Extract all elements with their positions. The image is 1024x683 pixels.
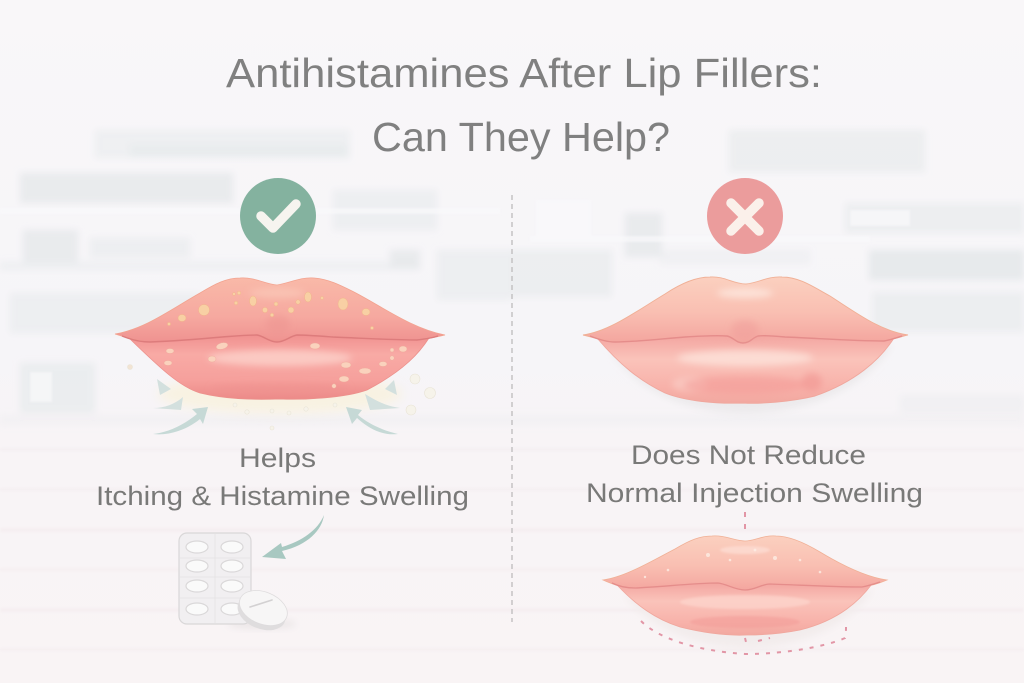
icon: blister pack and tablet [179,533,296,637]
title [226,50,822,160]
dashed vertical guide [744,512,746,533]
title: Antihistamines After Lip Fillers: [226,50,822,96]
left label: Helps [239,443,316,473]
swelling arrows [153,379,400,434]
right label [586,440,923,508]
title: Can They Help? [372,114,670,160]
right label: Normal Injection Swelling [586,478,923,508]
left label: Itching & Histamine Swelling [96,481,469,511]
right lips: large [583,277,908,414]
icon: green check [240,178,316,254]
bumps on upper lip [167,291,374,330]
icon: red cross [707,178,783,254]
bumps on lower lip [164,341,407,388]
right lips: small reduced [603,536,887,648]
dashed swelling outline [641,621,846,654]
right label: Does Not Reduce [631,440,866,470]
center divider [511,195,513,622]
left label [96,443,469,511]
arrow to pill pack [262,515,324,559]
droplets around lips [128,364,436,430]
left lips: itching with bumps [115,278,445,434]
